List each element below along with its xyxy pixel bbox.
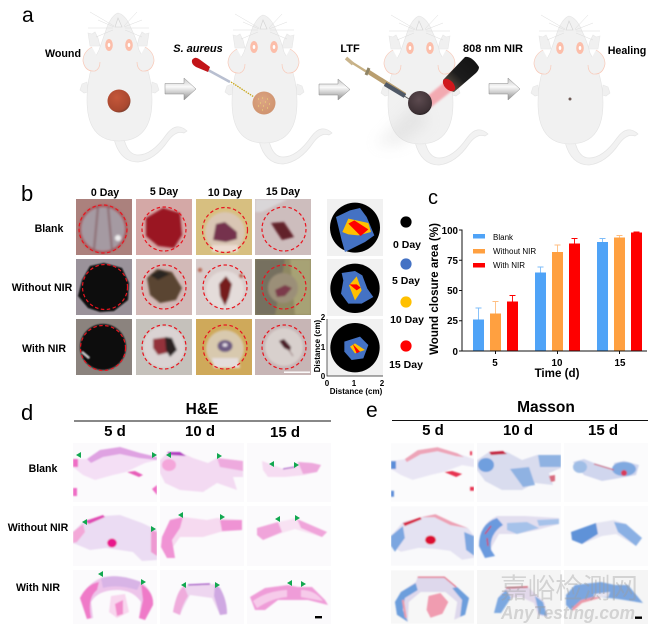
watermark: 嘉峪检测网	[500, 573, 638, 604]
y tick labels: 100	[442, 226, 459, 237]
y tick labels: 0	[453, 347, 459, 358]
photo with NIR 10 day	[196, 319, 252, 375]
HE blank 10 d	[160, 450, 244, 493]
x tick labels: 10	[552, 358, 563, 369]
photo without NIR 0 day	[76, 259, 132, 315]
scale bar	[635, 616, 642, 619]
contour legend: 15 Day	[389, 359, 423, 371]
Masson without NIR 15 d	[570, 520, 643, 547]
photo blank 0 day	[76, 199, 132, 255]
Masson with NIR 15 d	[564, 570, 648, 624]
HE without NIR 10 d	[160, 516, 243, 560]
x tick labels: 5	[492, 358, 498, 369]
HE with NIR 10 d	[172, 582, 228, 616]
HE blank 15 d	[262, 460, 322, 478]
y tick labels: 25	[447, 316, 459, 327]
day headings: 15 d	[588, 422, 618, 439]
y tick labels: 50	[447, 286, 459, 297]
bars	[473, 232, 642, 351]
panel d: H&E histology	[8, 400, 331, 624]
arrow 3	[489, 78, 520, 100]
panel c: bar chart	[428, 187, 647, 380]
label wound: Wound	[45, 48, 81, 60]
chart legend: Blank	[493, 233, 514, 242]
icon: syringe	[346, 58, 409, 99]
column headings: 0 Day	[91, 187, 119, 199]
photo with NIR 0 day	[76, 319, 132, 375]
chart legend	[473, 233, 536, 270]
label 808 nm NIR: 808 nm NIR	[463, 43, 523, 55]
column headings: 15 Day	[266, 186, 300, 198]
icon: NIR lamp	[441, 57, 479, 94]
day headings: 10 d	[503, 422, 533, 439]
Masson blank 10 d	[477, 450, 561, 491]
row headings: Without NIR	[8, 522, 69, 534]
photo blank 15 day	[255, 199, 311, 255]
row headings: Without NIR	[12, 282, 73, 294]
label a: a	[22, 4, 34, 27]
label c: c	[428, 187, 438, 209]
photo without NIR 5 day	[136, 259, 192, 315]
photo with NIR 5 day	[136, 319, 192, 375]
icon: swab	[192, 58, 254, 97]
y tick labels	[442, 226, 459, 358]
label d: d	[21, 400, 33, 425]
scale bar	[315, 616, 322, 618]
scale bar	[284, 372, 310, 373]
contour legend	[389, 216, 424, 371]
contour axes	[313, 313, 385, 396]
Masson with NIR 10 d	[477, 570, 561, 624]
day headings	[422, 422, 618, 439]
panel e: Masson histology	[366, 399, 648, 624]
HE without NIR 15 d	[256, 518, 328, 541]
day headings: 5 d	[422, 422, 444, 439]
chart legend: With NIR	[493, 261, 525, 270]
y tick labels: 75	[447, 256, 459, 267]
green wound-edge arrowheads	[76, 452, 306, 588]
photo with NIR 15 day	[255, 319, 311, 375]
contour axes: 0	[325, 379, 330, 388]
contour axes: 2	[380, 379, 385, 388]
heading H&E: H&E	[186, 401, 218, 418]
label LTF: LTF	[340, 43, 360, 55]
mouse 4 healed	[531, 15, 638, 165]
panel a: treatment schematic	[22, 4, 646, 165]
contour legend: 10 Day	[390, 314, 424, 326]
row headings: With NIR	[22, 343, 66, 355]
row headings: Blank	[29, 463, 58, 475]
Masson without NIR 5 d	[391, 513, 474, 560]
contour axes: 2	[321, 313, 326, 322]
photo without NIR 15 day	[255, 259, 311, 315]
watermark: AnyTesting.com	[500, 603, 635, 623]
Masson blank 15 d	[572, 458, 640, 482]
x tick labels	[492, 358, 626, 369]
Masson with NIR 5 d	[394, 575, 470, 624]
day headings: 10 d	[185, 423, 215, 440]
HE blank 5 d	[73, 446, 157, 498]
photo without NIR 10 day	[196, 259, 252, 315]
row headings	[12, 223, 73, 355]
panel b: wound photographs	[12, 181, 424, 396]
column headings	[91, 186, 300, 199]
label e: e	[366, 399, 378, 422]
wound contour maps	[327, 199, 383, 376]
contour axes: 0	[321, 372, 326, 381]
arrow 2	[319, 79, 350, 100]
mouse 3 with LTF and NIR	[375, 15, 488, 165]
day headings	[104, 423, 300, 441]
watermark	[500, 573, 638, 623]
chart legend: Without NIR	[493, 247, 536, 256]
HE with NIR 15 d	[249, 584, 328, 611]
mouse 2 infected wound	[225, 14, 332, 164]
HE without NIR 5 d	[73, 514, 157, 562]
day headings: 15 d	[270, 424, 300, 441]
row headings: Blank	[35, 223, 64, 235]
label healing: Healing	[608, 45, 646, 57]
contour legend: 0 Day	[393, 239, 421, 251]
Masson blank 5 d	[391, 446, 474, 498]
Masson without NIR 10 d	[478, 515, 560, 559]
axes	[459, 230, 647, 354]
HE with NIR 5 d	[79, 575, 154, 621]
day headings: 5 d	[104, 423, 126, 440]
heading Masson: Masson	[517, 399, 575, 416]
error bars	[476, 232, 640, 320]
photo blank 5 day	[136, 199, 192, 255]
column headings: 10 Day	[208, 187, 242, 199]
contour axes: Distance (cm)	[330, 387, 383, 396]
row headings: With NIR	[16, 582, 60, 594]
contour legend: 5 Day	[392, 275, 420, 287]
arrow 1	[165, 78, 196, 100]
label b: b	[21, 181, 33, 206]
contour axes: Distance (cm)	[313, 319, 322, 372]
x tick labels: 15	[615, 358, 626, 369]
column headings: 5 Day	[150, 186, 178, 198]
contour axes: 1	[352, 379, 357, 388]
photo blank 10 day	[196, 199, 252, 255]
y axis title: Wound closure area (%)	[428, 223, 441, 355]
mouse 1 with open wound	[80, 12, 187, 162]
label S. aureus: S. aureus	[173, 43, 223, 55]
row headings	[8, 463, 69, 594]
axis titles: Time (d)	[535, 367, 580, 380]
contour axes: 1	[321, 343, 326, 352]
